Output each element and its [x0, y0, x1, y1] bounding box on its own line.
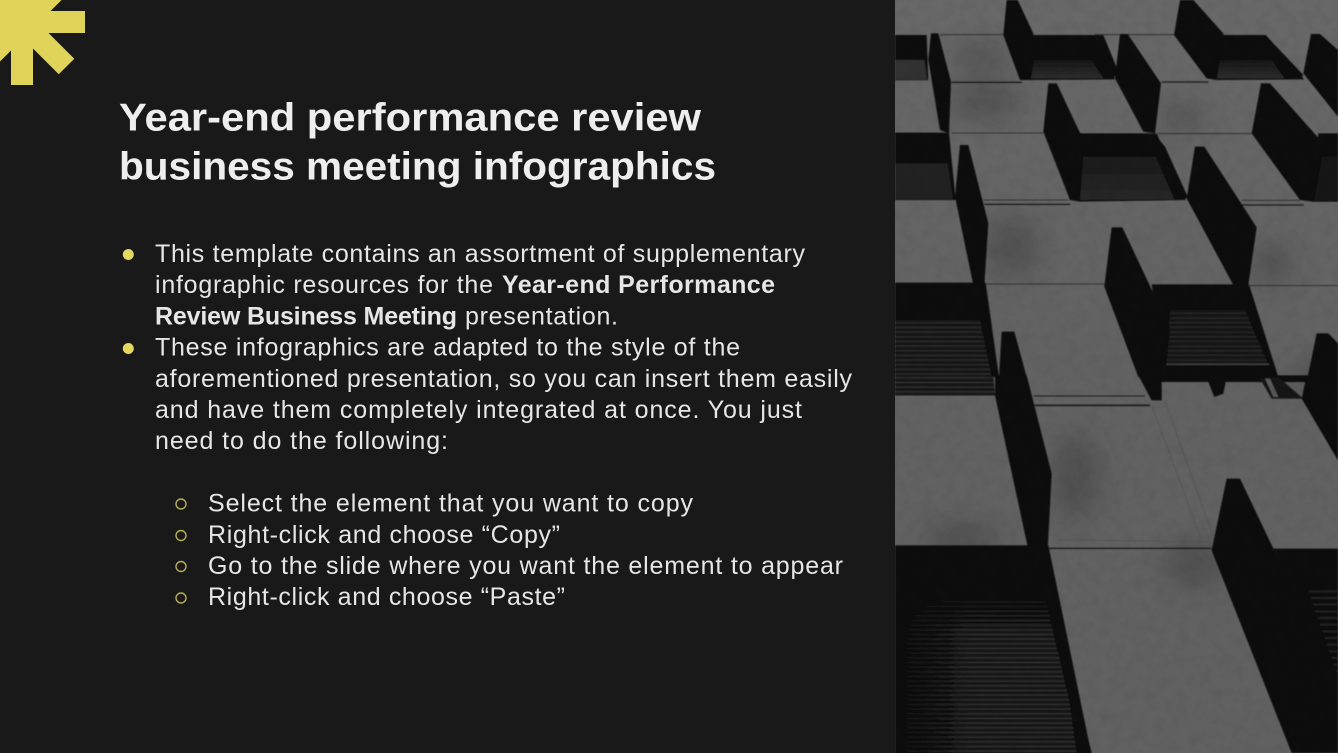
list: copy and paste steps: Select the element that you want to copy [208, 490, 694, 518]
photo: dark concrete building facade [895, 0, 1338, 753]
text block: first bullet: presentation. [465, 302, 618, 330]
fin [1212, 479, 1338, 753]
list: copy and paste steps [176, 490, 843, 611]
soft concrete shading [925, 43, 1335, 587]
text block: first bullet: This template contains an assortment of supplementary [155, 240, 806, 268]
fins [995, 375, 1052, 550]
list: copy and paste steps: Right-click and choose “Paste” [208, 583, 565, 611]
gutter lines [895, 35, 1338, 286]
icon: yellow asterisk star [0, 0, 85, 85]
title [119, 97, 716, 188]
text block: second bullet: need to do the following: [155, 427, 448, 455]
text block: first bullet [123, 240, 806, 330]
seams [1033, 396, 1212, 548]
text block: second bullet: and have them completely integrated at once. You just [155, 396, 802, 424]
concrete grain [895, 0, 1338, 753]
text block: second bullet [123, 334, 853, 455]
text block: first bullet: Review Business Meeting [155, 302, 457, 330]
text block: second bullet: aforementioned presentation, so you can insert them easily [155, 365, 852, 393]
title: business meeting infographics [119, 146, 716, 188]
lower right window [1273, 549, 1338, 680]
title: Year-end performance review [119, 97, 702, 140]
fins [928, 0, 1338, 377]
list: copy and paste steps: Go to the slide where you want the element to appear [208, 552, 843, 580]
lower left louvers [895, 545, 1092, 753]
text block: second bullet: These infographics are adapted to the style of the [155, 334, 740, 362]
text block: first bullet: infographic resources for the [155, 271, 493, 299]
list: copy and paste steps: Right-click and choose “Copy” [208, 521, 560, 549]
upper window [895, 375, 995, 395]
text block: first bullet: Year-end Performance [502, 271, 775, 299]
windows [895, 35, 1338, 377]
